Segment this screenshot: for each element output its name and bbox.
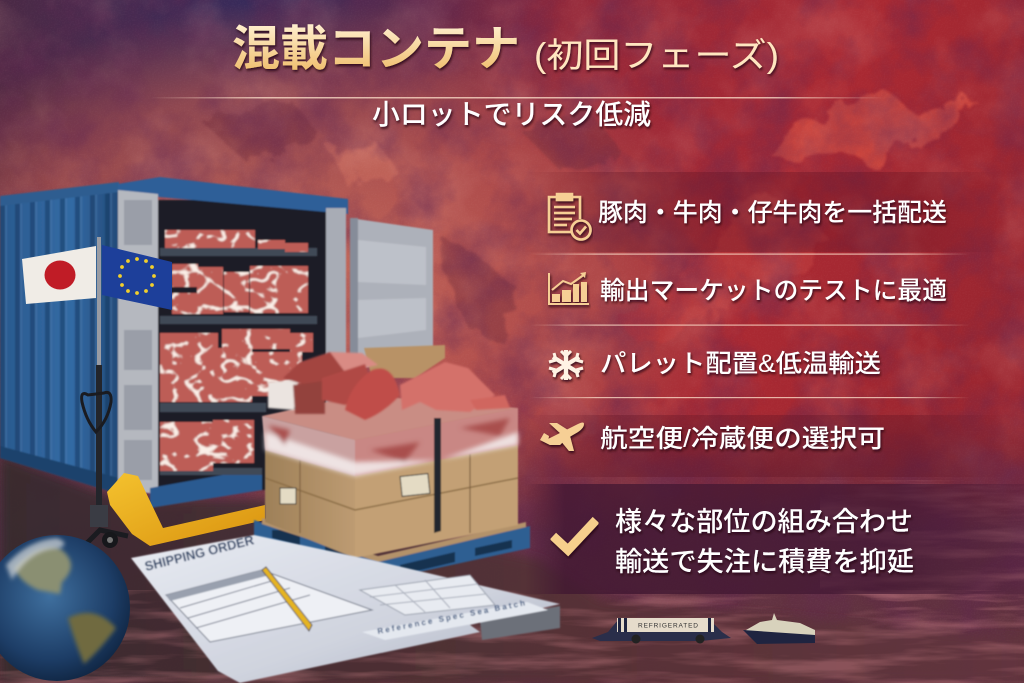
jack handle [82,237,128,548]
icon: refrigerated truck: REFRIGERATED [638,622,698,630]
icon: snowflake [549,350,583,380]
pencil [262,567,312,631]
open door [350,218,433,370]
container side wall [0,182,119,494]
back box [364,345,445,378]
container top rail [118,177,348,214]
icon: clipboard with check [549,194,590,240]
icon: bar chart rising [549,272,589,304]
callout text: 様々な部位の組み合わせ [615,507,913,537]
carton right face [355,408,518,558]
subtitle: 小ロットでリスク低減 [372,99,651,130]
right door post [326,208,346,420]
icon: refrigerated truck [592,618,731,644]
slip on paper: Reference Spec Sea Batch [377,598,526,636]
Japanese flag [22,246,96,304]
item 2 text: 輸出マーケットのテストに最適 [600,277,947,305]
document heading: SHIPPING ORDER [143,532,256,574]
illustration: shipping container with meat [0,177,433,508]
title divider [150,97,885,98]
loose meat pile [268,352,510,420]
callout panel: mixed cuts [525,484,1024,594]
container interior [158,200,340,490]
title [232,23,779,76]
jack forks [107,473,265,546]
strap [434,418,441,533]
shelves [160,248,317,475]
icon: cargo ship [743,613,815,644]
pallet jack [82,237,265,548]
container left door post [118,190,158,494]
pallet with boxed meat [254,345,530,581]
globe [0,535,130,681]
icon: check mark [553,520,596,550]
flags on pole [22,245,172,310]
blue pallet [254,518,530,581]
callout text [615,507,914,577]
callout text: 輸送で失注に積費を抑延 [615,547,914,577]
item 4 text: 航空便/冷蔵便の選択可 [600,425,885,453]
feature list panel [520,172,1010,477]
meat blocks [160,230,313,471]
container bottom rail [150,468,262,508]
title: 混載コンテナ [232,23,520,76]
carton top [262,395,518,440]
box labels [280,474,430,504]
shrink wrap with frost [262,408,518,476]
item 3 text: パレット配置&低温輸送 [600,350,881,378]
paper sheet [131,535,560,683]
EU flag [102,245,172,310]
title: (初回フェーズ) [534,37,779,75]
document table [166,570,495,642]
item 1 text: 豚肉・牛肉・仔牛肉を一括配送 [598,199,947,227]
icon: airplane [540,422,584,451]
carton left face [265,418,355,558]
document stack [480,606,560,640]
shipping order documents [131,532,560,683]
